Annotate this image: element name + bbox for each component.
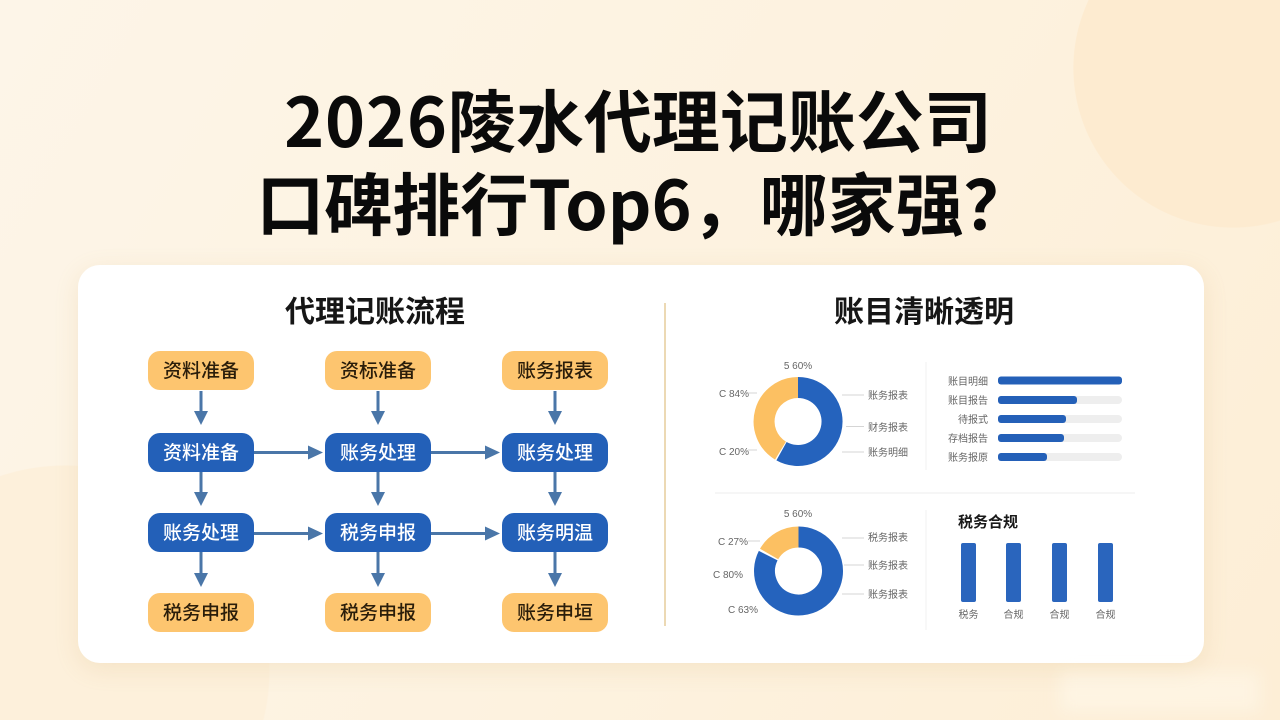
donut chart 1: 5 60%	[784, 361, 812, 372]
donut chart 1: C 84%	[719, 389, 749, 400]
step: row 4 column 3: 账务申垣	[517, 603, 593, 624]
donut chart 2: 5 60%	[784, 509, 812, 520]
step: row 1 column 1	[148, 351, 254, 390]
column chart: tax compliance: 税务	[958, 608, 978, 621]
column chart: tax compliance	[958, 513, 1116, 621]
title line 1: 2026陵水代理记账公司	[284, 68, 992, 167]
horizontal bar chart: 账目报告	[948, 394, 988, 407]
horizontal bar chart	[948, 375, 1122, 464]
horizontal bar chart: 存档报告	[948, 432, 988, 445]
column chart heading: 税务合规	[958, 513, 1018, 531]
step: row 3 column 2	[325, 513, 431, 552]
title line 2: 口碑排行Top6，哪家强？	[256, 151, 1032, 250]
donut chart 2: C 27%	[718, 537, 748, 548]
step: row 2 column 3	[502, 433, 608, 472]
donut chart 1: 财务报表	[868, 421, 908, 434]
donut chart 1	[719, 361, 908, 459]
step: row 3 column 1	[148, 513, 254, 552]
step: row 1 column 1: 资料准备	[163, 361, 239, 382]
title	[256, 68, 1032, 250]
donut chart 1: 账务报表	[868, 389, 908, 402]
step: row 4 column 3	[502, 593, 608, 632]
step: row 2 column 1: 资料准备	[163, 443, 239, 464]
flow arrows	[194, 391, 562, 587]
column chart: tax compliance: 合规	[1050, 608, 1070, 621]
column chart: tax compliance: 合规	[1096, 608, 1116, 621]
donut chart 2	[713, 509, 908, 616]
horizontal bar chart: 账务报原	[948, 451, 988, 464]
column chart: tax compliance: 合规	[1004, 608, 1024, 621]
step: row 1 column 2: 资标准备	[340, 361, 416, 382]
step: row 3 column 2: 税务申报	[340, 523, 416, 544]
step: row 2 column 3: 账务处理	[517, 443, 593, 464]
horizontal bar chart: 待报式	[958, 413, 988, 426]
panel: main card	[78, 265, 1204, 663]
donut chart 2: C 63%	[728, 605, 758, 616]
step: row 1 column 3	[502, 351, 608, 390]
heading: flow: 代理记账流程	[285, 296, 465, 329]
step: row 3 column 1: 账务处理	[163, 523, 239, 544]
step: row 4 column 1	[148, 593, 254, 632]
panel: bookkeeping flow	[148, 296, 608, 632]
donut chart 1: C 20%	[719, 447, 749, 458]
step: row 4 column 2: 税务申报	[340, 603, 416, 624]
step: row 4 column 1: 税务申报	[163, 603, 239, 624]
donut chart 2: 税务报表	[868, 531, 908, 544]
step: row 2 column 2: 账务处理	[340, 443, 416, 464]
step: row 2 column 2	[325, 433, 431, 472]
donut chart 1: 账务明细	[868, 446, 908, 459]
donut chart 2: C 80%	[713, 570, 743, 581]
step: row 1 column 3: 账务报表	[517, 361, 593, 382]
step: row 1 column 2	[325, 351, 431, 390]
horizontal bar chart: 账目明细	[948, 375, 988, 388]
step: row 4 column 2	[325, 593, 431, 632]
step: row 3 column 3: 账务明温	[517, 523, 593, 544]
heading: transparent accounts: 账目清晰透明	[834, 296, 1014, 329]
donut chart 2: 账务报表	[868, 559, 908, 572]
step: row 3 column 3	[502, 513, 608, 552]
donut chart 2: 账务报表	[868, 588, 908, 601]
step: row 2 column 1	[148, 433, 254, 472]
